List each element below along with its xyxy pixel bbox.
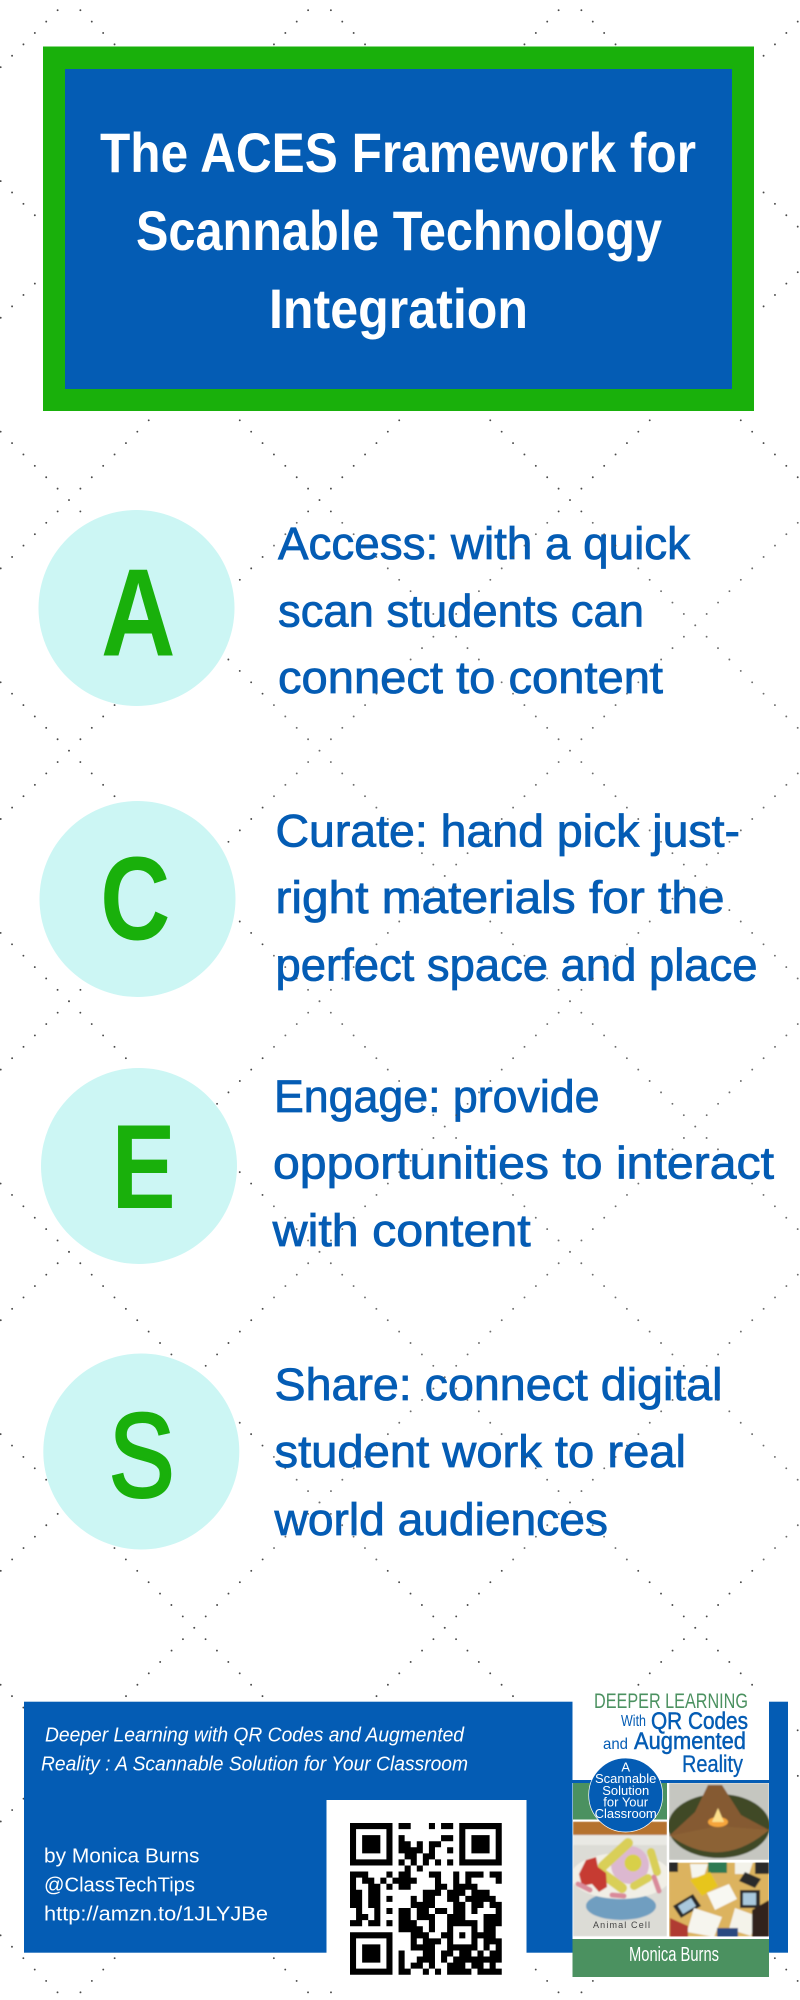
- cover title: [594, 1690, 748, 1778]
- footer panel: [24, 1702, 788, 1953]
- text: Access: [278, 518, 691, 703]
- text: Engage: [272, 1071, 775, 1256]
- author details: by Monica Burns: [44, 1845, 200, 1868]
- text: Curate: perfect space and place: [276, 940, 758, 990]
- circle: letter C: C: [100, 832, 170, 966]
- text: Access: scan students can: [278, 586, 644, 636]
- text: Curate: [276, 806, 758, 990]
- text: Access: connect to content: [278, 652, 664, 703]
- text: Engage: opportunities to interact: [273, 1138, 775, 1188]
- photo: animal cell model: Animal Cell: [593, 1920, 650, 1930]
- cover title: Reality: [682, 1751, 743, 1778]
- subtitle badge: A: [621, 1760, 630, 1775]
- author band: [572, 1939, 769, 1977]
- cover title: DEEPER LEARNING: [594, 1690, 748, 1713]
- subtitle badge: Scannable: [595, 1771, 656, 1786]
- photo: students with tablets: [669, 1862, 769, 1937]
- author band: Monica Burns: [629, 1944, 719, 1966]
- title: The ACES Framework for: [100, 121, 696, 184]
- text: Share: [273, 1359, 722, 1545]
- author details: @ClassTechTips: [44, 1874, 195, 1897]
- circle: letter E: [41, 1068, 237, 1264]
- item: E Engage: [41, 1068, 775, 1264]
- title: Scannable Technology: [136, 199, 662, 262]
- cover title: With: [621, 1713, 646, 1730]
- text: Share: student work to real: [274, 1426, 686, 1477]
- photo: volcano model: [668, 1783, 770, 1860]
- item: A Access: [38, 510, 691, 706]
- book title: [41, 1724, 468, 1776]
- QR code: [326, 1800, 526, 1985]
- subtitle badge: [589, 1758, 663, 1832]
- text: Curate: Curate: hand pick just-: [276, 806, 740, 856]
- cover title: QR Codes: [651, 1708, 748, 1735]
- text: Access: Access: with a quick: [278, 518, 691, 569]
- circle: letter C: [40, 801, 236, 997]
- cover title: and: [603, 1736, 628, 1753]
- subtitle badge: Solution: [602, 1783, 649, 1798]
- text: Engage: with content: [272, 1205, 531, 1256]
- text: Share: Share: connect digital: [274, 1359, 722, 1410]
- circle: letter S: [43, 1354, 239, 1550]
- book title: Deeper Learning with QR Codes and Augmented: [45, 1724, 465, 1747]
- title: Integration: [269, 277, 528, 340]
- item: C Curate: [40, 801, 758, 997]
- circle: letter A: A: [101, 544, 176, 682]
- subtitle badge: for Your: [603, 1795, 649, 1810]
- photo: animal cell model: [571, 1822, 671, 1936]
- title panel: [43, 46, 754, 411]
- text: Share: world audiences: [273, 1494, 608, 1545]
- circle: letter S: S: [109, 1390, 174, 1522]
- book cover: [571, 1688, 770, 1977]
- title: [100, 121, 696, 340]
- subtitle badge: Classroom: [595, 1806, 657, 1821]
- book title: Reality : A Scannable Solution for Your Classroom: [41, 1753, 468, 1776]
- cover title: Augmented: [634, 1728, 746, 1755]
- text: Engage: Engage: provide: [274, 1071, 600, 1122]
- circle: letter A: [38, 510, 234, 706]
- item: S Share: [43, 1354, 723, 1550]
- author details: [44, 1845, 268, 1926]
- text: Curate: right materials for the: [276, 872, 724, 923]
- circle: letter E: E: [112, 1100, 176, 1234]
- author details: http://amzn.to/1JLYJBe: [44, 1903, 268, 1926]
